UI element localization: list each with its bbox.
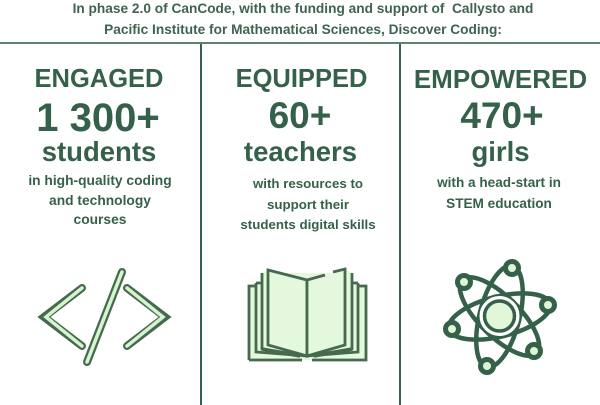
description: students: in high-quality coding [28, 173, 172, 188]
panel: equipped [236, 65, 376, 232]
description: teachers [240, 176, 376, 232]
heading: engaged: ENGAGED [35, 65, 163, 93]
description: girls: STEM education [446, 196, 552, 211]
intro text: Pacific Institute for Mathematical Sciences, Discover Coding: [104, 22, 502, 36]
description: teachers: with resources to [253, 176, 363, 191]
description: teachers: students digital skills [240, 217, 376, 232]
number: 60+: 60+ [269, 95, 331, 136]
intro text: In phase 2.0 of CanCode, with the funding and support of Callysto and [73, 1, 533, 16]
column divider left [200, 44, 202, 405]
heading: equipped: EQUIPPED [236, 65, 367, 93]
heading: empowered: EMPOWERED [414, 64, 587, 94]
description: girls [437, 175, 561, 211]
number: 470+: 470+ [460, 95, 544, 136]
top divider [0, 42, 600, 44]
panel: empowered [414, 64, 587, 211]
label: teachers: teachers [244, 136, 357, 167]
description: students [28, 173, 172, 227]
description: girls: with a head-start in [437, 175, 561, 190]
icon: open book [249, 269, 366, 360]
description: students: and technology [49, 192, 151, 208]
label: girls: girls [471, 136, 530, 167]
icon: atom [444, 261, 555, 372]
number: 1 300+: 1 300+ [36, 96, 160, 140]
column divider right [399, 44, 401, 405]
description: students: courses [74, 212, 126, 227]
description: teachers: support their [267, 196, 349, 212]
intro text [73, 1, 533, 37]
icon: code brackets [44, 272, 165, 362]
panel: engaged [28, 65, 172, 227]
label: students: students [42, 136, 156, 167]
